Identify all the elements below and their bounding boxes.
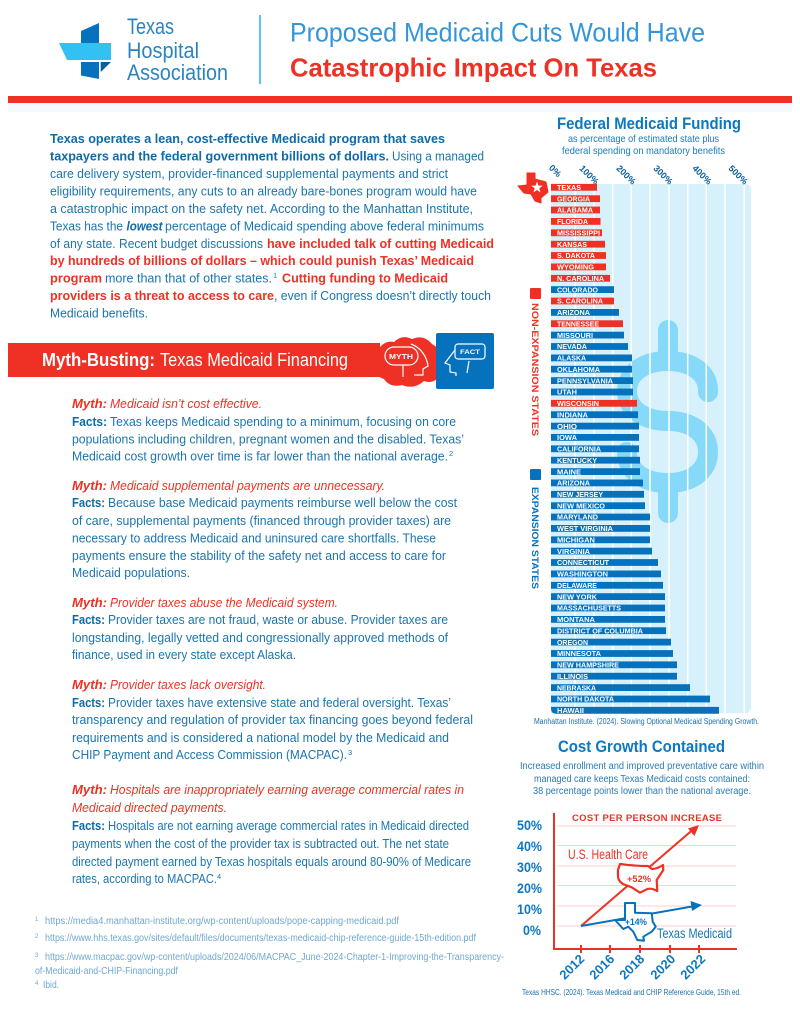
- state bars: S. CAROLINA: [557, 297, 604, 306]
- state bars: CALIFORNIA: [557, 444, 602, 454]
- myth 3: Myth:: [72, 595, 107, 610]
- arrow: us health care: [581, 825, 699, 926]
- myth 2: Medicaid supplemental payments are unnecessary.: [110, 478, 385, 493]
- x axis labels: 2018: [616, 951, 647, 982]
- myth 2: necessary to address Medicaid and uninsured care shortfalls. These: [72, 531, 436, 546]
- intro paragraph: have included talk of cutting Medicaid: [267, 236, 494, 251]
- axis labels: 300%: [651, 163, 675, 187]
- myth 5: [72, 782, 471, 886]
- intro paragraph: more than that of other states.: [105, 271, 272, 286]
- state bars: MICHIGAN: [557, 536, 595, 544]
- myth 1: [72, 396, 464, 464]
- myth 3: Facts:: [72, 612, 105, 627]
- icon: myth head in red cloud: MYTH: [389, 354, 413, 361]
- banner heading: [42, 350, 348, 370]
- heading: cost growth contained: [520, 738, 764, 797]
- footnotes: https://www.macpac.gov/wp-content/uploads/2024/06/MACPAC_June-2024-Chapter-1-Improving-the-Transparency-: [45, 952, 504, 963]
- myth 2: Medicaid populations.: [72, 565, 190, 580]
- myth 5: rates, according to MACPAC.: [72, 871, 217, 886]
- myth 4: Provider taxes have extensive state and federal oversight. Texas’: [108, 695, 451, 710]
- myth 4: transparency and regulation of provider tax financing goes beyond federal: [72, 712, 473, 727]
- state bars: WYOMING: [557, 263, 594, 272]
- intro paragraph: program: [50, 271, 102, 286]
- intro paragraph: a catastrophic impact on the safety net. According to the Manhattan Institute,: [50, 201, 473, 216]
- intro paragraph: Texas has the: [50, 218, 123, 233]
- myth 5: Myth:: [72, 782, 107, 797]
- state bars: UTAH: [557, 388, 577, 397]
- intro paragraph: taxpayers and the federal government billions of dollars.: [50, 148, 389, 164]
- series label: us health care: U.S. Health Care: [568, 847, 648, 862]
- x axis labels: 2020: [647, 951, 678, 982]
- footnotes: of-Medicaid-and-CHIP-Financing.pdf: [35, 966, 178, 977]
- myth 4: 3: [348, 748, 352, 757]
- myth 3: Provider taxes are not fraud, waste or abuse. Provider taxes are: [108, 612, 448, 627]
- state bars: TEXAS: [557, 183, 581, 192]
- state bars: NEW YORK: [557, 592, 598, 601]
- heading: cost growth contained: Increased enrollment and improved preventative care within: [520, 761, 764, 772]
- state bars: FLORIDA: [557, 217, 589, 226]
- state bars: S. DAKOTA: [557, 251, 596, 260]
- myth 2: Myth:: [72, 478, 107, 493]
- state bars: PENNSYLVANIA: [557, 376, 614, 385]
- icon: fact head in blue box: FACT: [460, 349, 480, 356]
- intro paragraph: Medicaid benefits.: [50, 306, 148, 321]
- y axis labels: 0%: [523, 922, 541, 938]
- intro paragraph: Cutting funding to Medicaid: [282, 271, 448, 286]
- icon: myth head in red cloud: [376, 337, 438, 387]
- x axis labels: [556, 951, 708, 982]
- myth 5: Hospitals are not earning average commercial rates in Medicaid directed: [108, 818, 469, 833]
- state bars: MINNESOTA: [557, 649, 602, 658]
- chart title: COST PER PERSON INCREASE: [572, 813, 722, 824]
- heading: cost growth contained: 38 percentage points lower than the national average.: [533, 786, 751, 797]
- state bars: WEST VIRGINIA: [557, 524, 614, 533]
- state bars: N. CAROLINA: [557, 274, 605, 283]
- state bars: MISSOURI: [557, 331, 593, 340]
- state bars: MONTANA: [557, 615, 596, 624]
- icon: dollar sign watermark: [627, 330, 708, 513]
- state bars: NEW JERSEY: [557, 490, 603, 499]
- myth 2: [72, 478, 457, 580]
- legend: expansion states: EXPANSION STATES: [529, 487, 540, 589]
- state bars: WISCONSIN: [557, 399, 599, 408]
- logo: Texas Hospital Association: Hospital: [127, 38, 199, 63]
- intro paragraph: , even if Congress doesn’t directly touch: [274, 288, 491, 303]
- axis labels: 500%: [726, 163, 750, 187]
- chart heading: federal medicaid funding: as percentage of estimated state plus: [568, 133, 719, 145]
- myth 3: [72, 595, 448, 662]
- myth 1: Texas keeps Medicaid spending to a minimum, focusing on core: [110, 414, 456, 429]
- state bars: TENNESSEE: [557, 319, 599, 328]
- y axis labels: 20%: [517, 880, 542, 896]
- state bars: OKLAHOMA: [557, 365, 601, 374]
- icon: us map +52%: [618, 864, 663, 893]
- source: texas hhsc: Texas HHSC. (2024). Texas Medicaid and CHIP Reference Guide, 15th ed.: [522, 988, 741, 997]
- y axis labels: 50%: [517, 817, 542, 833]
- arrow: texas medicaid: [581, 901, 702, 926]
- footnotes: [35, 916, 504, 991]
- state bars: MASSACHUSETTS: [557, 604, 621, 613]
- chart heading: federal medicaid funding: Federal Medicaid Funding: [557, 114, 741, 133]
- y axis labels: 30%: [517, 859, 542, 875]
- state bars: KANSAS: [557, 240, 587, 249]
- footnotes: https://media4.manhattan-institute.org/wp-content/uploads/pope-capping-medicaid.pdf: [45, 916, 399, 927]
- state bars: MARYLAND: [557, 513, 599, 522]
- myth 1: Medicaid isn’t cost effective.: [110, 396, 262, 411]
- myth 1: 2: [449, 449, 453, 458]
- logo: Texas Hospital Association: [59, 14, 228, 85]
- state bars: WASHINGTON: [557, 570, 608, 579]
- series label: texas medicaid: Texas Medicaid: [657, 926, 732, 941]
- state bars: ARIZONA: [557, 308, 591, 317]
- footnotes: 4: [35, 981, 39, 987]
- myth 2: Because base Medicaid payments reimburse well below the cost: [108, 495, 457, 510]
- intro paragraph: 1: [273, 271, 277, 280]
- myth 3: longstanding, legally vetted and congressionally approved methods of: [72, 630, 448, 645]
- x axis labels: 2022: [677, 951, 708, 982]
- state bars: VIRGINIA: [557, 547, 591, 556]
- state bars: ILLINOIS: [557, 672, 588, 681]
- state bars: CONNECTICUT: [557, 558, 609, 567]
- myth 3: Provider taxes abuse the Medicaid system.: [110, 595, 338, 610]
- myth 4: CHIP Payment and Access Commission (MACPAC).: [72, 747, 347, 762]
- state bars: NEBRASKA: [557, 683, 597, 692]
- logo: Texas Hospital Association: Texas: [127, 14, 174, 39]
- y axis labels: 40%: [517, 838, 542, 854]
- banner heading: Myth-Busting:: [42, 350, 155, 370]
- line chart: cost per person increase: [517, 813, 737, 982]
- state bars: OREGON: [557, 638, 588, 647]
- myth 5: 4: [217, 872, 221, 881]
- chart heading: federal medicaid funding: [557, 114, 741, 157]
- myth 4: Provider taxes lack oversight.: [110, 677, 266, 692]
- x axis labels: 2012: [556, 951, 587, 982]
- axis labels: [547, 163, 750, 187]
- icon: us map +52%: +52%: [627, 874, 651, 884]
- intro paragraph: [50, 131, 494, 321]
- state bars: NEW MEXICO: [557, 501, 605, 510]
- icon: texas star marker: [518, 173, 548, 203]
- state bars: [551, 183, 719, 715]
- myth 2: payments ensure the stability of the safety net and access to care for: [72, 548, 447, 563]
- intro paragraph: care delivery system, provider-financed supplemental payments and strict: [50, 166, 448, 181]
- intro paragraph: providers is a threat to access to care: [50, 288, 274, 303]
- state bars: DISTRICT OF COLUMBIA: [557, 626, 644, 635]
- title: [290, 18, 705, 83]
- myth 4: requirements and is considered a national model by the Medicaid and: [72, 730, 449, 745]
- state bars: OHIO: [557, 422, 577, 431]
- myth 1: Facts:: [72, 414, 107, 429]
- myth 2: Facts:: [72, 495, 105, 510]
- axis labels: 400%: [690, 163, 714, 187]
- icon: texas map +14%: +14%: [625, 917, 647, 927]
- chart heading: federal medicaid funding: federal spending on mandatory benefits: [562, 145, 725, 157]
- state bars: NORTH DAKOTA: [557, 695, 615, 704]
- myth 3: finance, used in every state except Alaska.: [72, 647, 296, 662]
- myth 1: Medicaid cost growth over time is far lower than the national average.: [72, 449, 448, 464]
- state bars: NEW HAMPSHIRE: [557, 660, 619, 670]
- myth 5: Hospitals are inappropriately earning average commercial rates in: [110, 782, 464, 797]
- myth 2: of care, supplemental payments (financed through provider taxes) are: [72, 513, 451, 528]
- intro paragraph: Texas operates a lean, cost-effective Medicaid program that saves: [50, 131, 445, 146]
- header: [8, 14, 792, 112]
- state bars: DELAWARE: [557, 581, 597, 590]
- heading: cost growth contained: Cost Growth Contained: [558, 738, 725, 756]
- state bars: INDIANA: [557, 410, 589, 419]
- myth 1: populations including children, pregnant women and the disabled. Texas’: [72, 432, 464, 446]
- title: Proposed Medicaid Cuts Would Have: [290, 18, 705, 48]
- intro paragraph: by hundreds of billions of dollars – which could punish Texas’ Medicaid: [50, 253, 474, 268]
- bar chart: federal medicaid funding by state: [518, 163, 751, 715]
- myth 5: directed payment earned by Texas hospitals equals around 80-90% of Medicare: [72, 854, 471, 869]
- title: Catastrophic Impact On Texas: [290, 53, 657, 83]
- state bars: ALASKA: [557, 354, 587, 363]
- myth-busting banner: [8, 333, 494, 389]
- state bars: GEORGIA: [557, 194, 591, 203]
- state bars: COLORADO: [557, 285, 598, 294]
- myth 1: Myth:: [72, 396, 107, 411]
- footnotes: https://www.hhs.texas.gov/sites/default/files/documents/texas-medicaid-chip-reference-guide-15th-edition.pdf: [45, 933, 476, 944]
- logo: Texas Hospital Association: Association: [127, 60, 228, 85]
- x axis labels: 2016: [586, 951, 617, 982]
- state bars: MAINE: [557, 467, 581, 476]
- axis labels: 100%: [577, 163, 601, 187]
- myth 4: Myth:: [72, 677, 107, 692]
- myth 4: Facts:: [72, 695, 105, 710]
- footnotes: 1: [35, 917, 39, 923]
- axis labels: 0%: [547, 163, 563, 179]
- axis labels: 200%: [614, 163, 638, 187]
- heading: cost growth contained: managed care keeps Texas Medicaid costs contained:: [534, 774, 750, 785]
- myth 5: Medicaid directed payments.: [72, 800, 227, 815]
- intro paragraph: of any state. Recent budget discussions: [50, 236, 263, 251]
- footnotes: 2: [35, 934, 39, 940]
- state bars: HAWAII: [557, 706, 584, 715]
- intro paragraph: Using a managed: [392, 148, 484, 164]
- icon: fact head in blue box: [436, 333, 494, 389]
- banner heading: Texas Medicaid Financing: [160, 350, 348, 370]
- legend: non-expansion states: NON-EXPANSION STATES: [529, 303, 540, 436]
- footnotes: Ibid.: [43, 980, 59, 991]
- footnotes: 3: [35, 953, 39, 959]
- intro paragraph: eligibility requirements, any cuts to an already bare-bones program would have: [50, 183, 477, 198]
- state bars: MISSISSIPPI: [557, 228, 600, 238]
- myth 5: Facts:: [72, 818, 105, 833]
- source: manhattan institute: Manhattan Institute. (2024). Slowing Optional Medicaid Spending Growth.: [534, 717, 759, 726]
- y axis labels: [517, 817, 542, 938]
- state bars: ALABAMA: [557, 206, 594, 215]
- state bars: IOWA: [557, 433, 578, 442]
- intro paragraph: lowest: [126, 218, 163, 233]
- icon: texas map +14%: [615, 903, 656, 941]
- state bars: NEVADA: [557, 342, 588, 351]
- state bars: KENTUCKY: [557, 456, 597, 465]
- state bars: ARIZONA: [557, 479, 591, 488]
- myth 4: [72, 677, 473, 762]
- myth 5: payments when the cost of the provider tax is subtracted out. The net state: [72, 836, 449, 851]
- intro paragraph: percentage of Medicaid spending above federal minimums: [165, 218, 484, 233]
- y axis labels: 10%: [517, 901, 542, 917]
